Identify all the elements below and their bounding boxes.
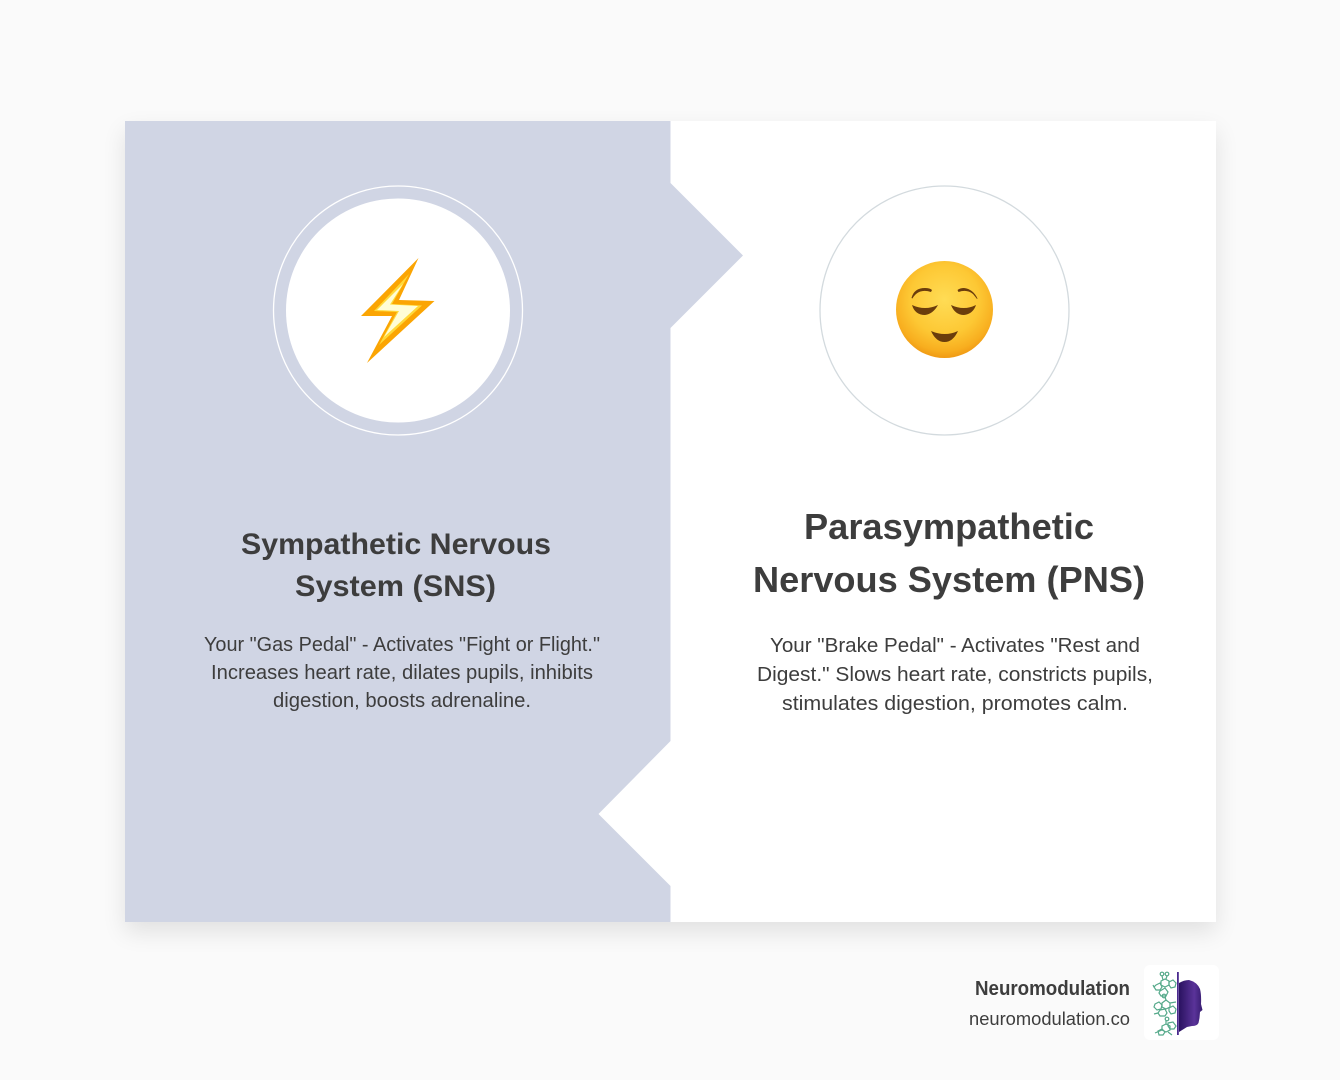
heading: parasympathetic nervous system: Parasympathetic [804, 506, 1094, 547]
icon: lightning bolt [361, 258, 434, 363]
panel shape with arrow and notch [125, 121, 743, 922]
text block: sympathetic description [204, 634, 600, 712]
text block: parasympathetic description [757, 634, 1153, 715]
text block: sympathetic description: digestion, boosts adrenaline. [273, 690, 531, 712]
panel: parasympathetic nervous system [753, 186, 1153, 715]
icon ring: parasympathetic [820, 186, 1069, 435]
icon: relieved face [896, 261, 993, 358]
text block: parasympathetic description: Your "Brake Pedal" - Activates "Rest and [770, 634, 1140, 657]
text block: parasympathetic description: stimulates digestion, promotes calm. [782, 692, 1128, 715]
heading: sympathetic nervous system: System (SNS) [295, 570, 496, 603]
heading: sympathetic nervous system: Sympathetic Nervous [241, 528, 551, 561]
panel: card background [125, 121, 1216, 922]
footer: brand [969, 965, 1219, 1040]
heading: sympathetic nervous system [241, 528, 551, 603]
text block: sympathetic description: Your "Gas Pedal" - Activates "Fight or Flight." [204, 634, 600, 656]
text block: parasympathetic description: Digest." Slows heart rate, constricts pupils, [757, 663, 1153, 686]
heading: parasympathetic nervous system: Nervous System (PNS) [753, 559, 1145, 600]
icon ring: sympathetic [274, 186, 522, 435]
logo: molecule and head [1144, 965, 1219, 1040]
text block: sympathetic description: Increases heart rate, dilates pupils, inhibits [211, 662, 593, 684]
panel: sympathetic nervous system [125, 121, 743, 922]
heading: parasympathetic nervous system [753, 506, 1145, 600]
brand url: neuromodulation.co [969, 1008, 1130, 1029]
brand name: Neuromodulation [975, 978, 1130, 1000]
